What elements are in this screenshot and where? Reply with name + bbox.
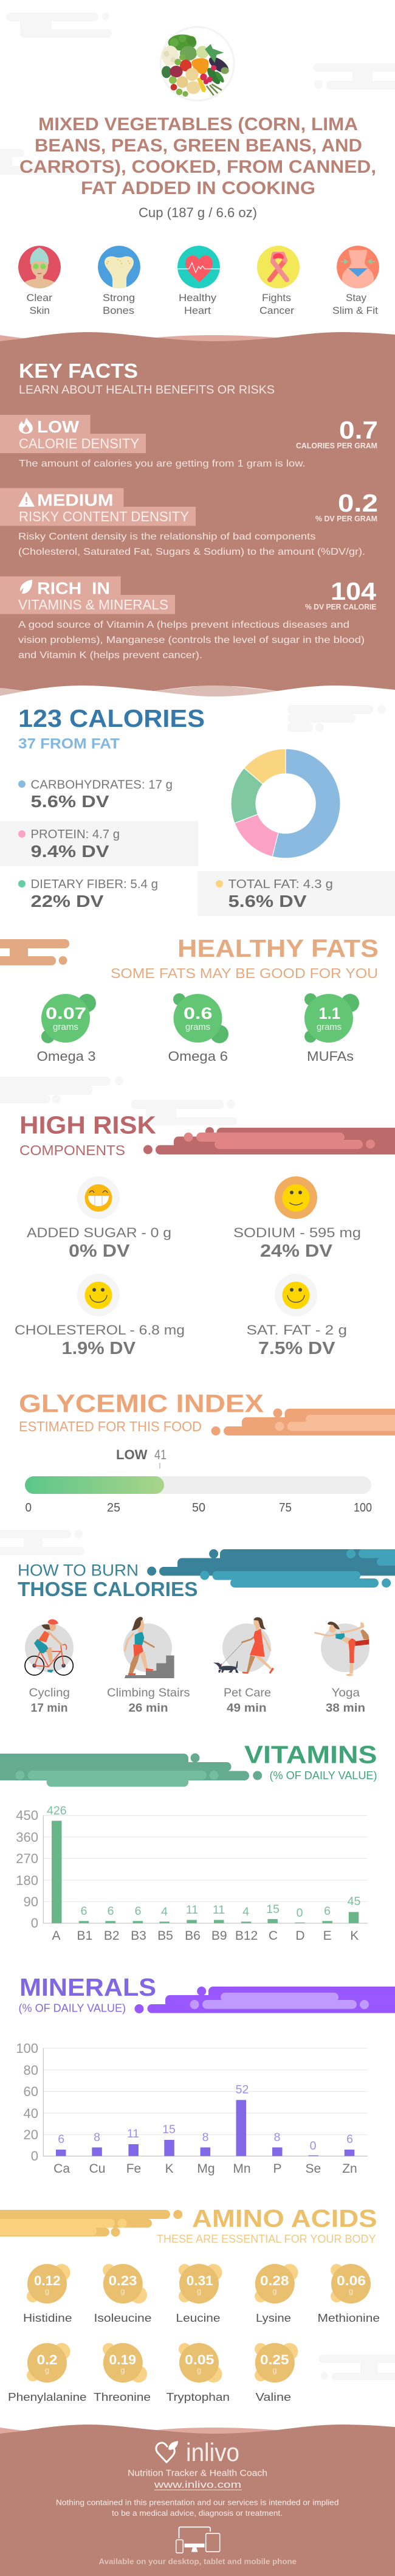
bar chart: minerals: 8 [202,2131,208,2144]
activity: pet care [213,1617,274,1674]
icon: slim and fit [337,246,379,289]
risk: cholesterol: CHOLESTEROL - 6.8 mg [15,1322,185,1338]
activity labels: 17 min [30,1701,68,1715]
heading: how to burn those calories: THOSE CALORIES [18,1578,198,1600]
benefit labels: Heart [184,305,211,316]
footer text: Nothing contained in this presentation and our services is intended or implied [56,2499,339,2507]
bar chart: minerals: 11 [127,2127,139,2140]
icon: fights cancer [257,246,300,288]
fact: risky content density [0,488,378,557]
legend: carbohydrates: CARBOHYDRATES: 17 g [30,779,173,792]
benefit labels: Strong [103,292,135,304]
bar chart: minerals: 0 [310,2139,317,2153]
fact: rich in vitamins and minerals: A good source of Vitamin A (helps prevent infectious diseases and [18,620,349,630]
bar chart: minerals: 6 [346,2133,353,2146]
benefit labels: Stay [346,292,366,304]
glycemic index gauge: 0 [26,1501,32,1515]
amino: phenylalanine: 0.2 [36,2352,57,2367]
glycemic index gauge: 50 [192,1501,205,1515]
activity: climbing stairs [123,1617,174,1678]
bar chart: vitamins: K [350,1929,359,1943]
icon: devices [176,2527,220,2553]
bar chart: vitamins: 6 [135,1904,141,1918]
amino: threonine: g [120,2366,125,2375]
legend: protein: 9.4% DV [30,842,109,861]
bar chart: minerals: K [165,2162,174,2176]
bar chart: minerals: P [273,2162,282,2176]
benefit labels: Cancer [259,305,294,316]
amino: leucine: 0.31 [187,2273,213,2288]
risk: sodium [233,1176,361,1261]
heading: amino acids [157,2204,377,2245]
bar chart: vitamins: 0 [31,1915,38,1931]
bar chart: vitamins: D [295,1929,305,1943]
heading: calories [18,704,205,752]
glycemic index gauge: LOW [116,1447,148,1462]
panel: footer background [0,2425,395,2576]
icon: clear skin [18,246,61,288]
icon: flame [19,418,33,434]
fact: calorie density: 0.7 [339,416,378,444]
amino: valine: Valine [255,2391,291,2403]
amino: threonine: 0.19 [109,2352,136,2367]
activity: yoga [315,1622,369,1676]
heading: glycemic index: GLYCEMIC INDEX [19,1389,264,1417]
amino: leucine: g [197,2286,201,2296]
amino: leucine: Leucine [176,2312,220,2324]
heading: key facts: KEY FACTS [19,359,138,382]
title: CARROTS), COOKED, FROM CANNED, [19,157,376,177]
amino: isoleucine [94,2264,152,2324]
activity labels: 49 min [227,1701,266,1715]
bar chart: vitamins: 0 [297,1906,303,1920]
footer text [56,2468,339,2518]
stat: mufas: 1.1 [318,1004,340,1022]
heading: minerals [18,1973,156,2015]
bar chart: minerals: 40 [24,2106,38,2121]
activity labels [29,1686,365,1715]
footer text: www.inlivo.com [154,2480,241,2490]
banner shape: amino acids [0,2210,182,2237]
heading: minerals: (% OF DAILY VALUE) [18,2001,126,2015]
risk: saturated fat [247,1274,347,1358]
amino: lysine [255,2264,298,2324]
legend: carbohydrates [18,779,173,811]
glycemic index gauge [25,1447,372,1515]
fact: risky content density: (Cholesterol, Saturated Fat, Sugars & Sodium) to the amount (%DV/gr). [18,547,365,557]
banner shape: high risk [143,1127,395,1154]
heading: healthy fats: HEALTHY FATS [177,934,379,962]
stat: omega 6: Omega 6 [168,1049,228,1064]
activity: cycling [25,1619,74,1675]
heading: vitamins: VITAMINS [244,1741,377,1769]
glycemic index gauge: 25 [107,1501,120,1515]
amino: phenylalanine: Phenylalanine [8,2391,86,2403]
glycemic index gauge: 100 [354,1501,372,1515]
bar chart: minerals: 100 [16,2041,38,2056]
fact: calorie density: LOW [37,417,79,436]
risk: sodium: 24% DV [260,1241,333,1261]
risk: cholesterol: 1.9% DV [62,1339,136,1358]
bar chart: vitamins: 11 [186,1903,198,1917]
amino: isoleucine: Isoleucine [94,2312,152,2324]
donut chart: calorie sources [231,749,340,858]
bar chart: vitamins: B5 [157,1929,173,1943]
bar chart: vitamins: 45 [348,1895,360,1908]
amino: methionine [317,2264,380,2324]
heading: calories: 37 FROM FAT [18,736,120,752]
fact: calorie density: The amount of calories you are getting from 1 gram is low. [19,459,305,469]
logo: inlivo [156,2438,239,2467]
heading: glycemic index [19,1389,264,1434]
benefit labels: Skin [29,305,50,316]
activity labels: Cycling [29,1686,70,1699]
benefit labels: Slim & Fit [332,305,378,316]
risk: saturated fat: 7.5% DV [258,1339,335,1358]
bar chart: vitamins: B3 [131,1929,146,1943]
stat: omega 3: grams [53,1022,78,1032]
benefit icons row [18,246,379,288]
amino: histidine: g [45,2286,49,2296]
amino: isoleucine: 0.23 [109,2273,137,2288]
fact: calorie density [0,415,378,469]
amino: leucine [176,2264,222,2324]
icon: strong bones [98,246,140,289]
risk: added sugar: ADDED SUGAR - 0 g [27,1225,171,1240]
fact: rich in vitamins and minerals [0,577,377,661]
amino: methionine: g [349,2286,353,2296]
stat: mufas: grams [317,1022,342,1032]
bar chart: minerals: 60 [24,2084,38,2099]
stat: omega 6: 0.6 [184,1004,213,1022]
heading: vitamins [244,1741,377,1782]
food photo: mixed vegetables [160,27,234,100]
benefit labels: Fights [262,292,291,304]
banner shape: glycemic index [211,1409,395,1436]
amino: methionine: Methionine [317,2312,380,2324]
amino: threonine: Threonine [94,2391,151,2403]
fact: calorie density: CALORIE DENSITY [19,436,139,451]
title: BEANS, PEAS, GREEN BEANS, AND [35,136,362,156]
fact: risky content density: % DV PER GRAM [315,515,377,523]
legend: carbohydrates: 5.6% DV [30,792,109,811]
footer text: Nutrition Tracker & Health Coach [128,2468,267,2478]
bar chart: minerals: 8 [94,2131,100,2144]
bar chart: vitamins: 6 [108,1904,114,1918]
bar chart: vitamins: 270 [16,1851,38,1866]
bar chart: vitamins: 6 [81,1904,87,1918]
legend: dietary fiber [18,878,158,911]
amino: valine: 0.25 [260,2352,289,2367]
legend: protein [0,821,198,866]
legend: total fat [197,871,395,916]
stat: omega 3: Omega 3 [36,1049,96,1064]
benefit labels [27,292,378,316]
bar chart: vitamins: B1 [77,1929,92,1943]
heading: how to burn those calories [18,1561,198,1600]
legend: dietary fiber: 22% DV [30,892,104,911]
heading: high risk: COMPONENTS [19,1142,125,1158]
bar chart: minerals: 20 [24,2127,38,2142]
fact: risky content density: Risky Content density is the relationship of bad components [18,532,316,542]
bar chart: minerals: 0 [31,2148,38,2164]
logo: inlivo: inlivo [186,2438,239,2467]
banner shape: vitamins [0,1753,262,1787]
bar chart: vitamins: 4 [242,1905,249,1918]
bar chart: minerals: Mg [197,2162,215,2176]
bar chart: vitamins: C [269,1929,278,1943]
benefit labels: Healthy [179,292,217,304]
serving size: Cup (187 g / 6.6 oz) [139,205,257,220]
fact: rich in vitamins and minerals: 104 [331,577,376,605]
banner shape: healthy fats [0,939,69,965]
amino: tryptophan: 0.05 [185,2352,214,2367]
title: FAT ADDED IN COOKING [81,178,315,198]
panel: key facts background waves [0,332,395,696]
amino: lysine: 0.28 [260,2273,289,2288]
bar chart: vitamins: 6 [324,1904,331,1918]
bar chart: minerals: Se [305,2162,321,2176]
glycemic index gauge: 41 [154,1447,167,1462]
amino: tryptophan: g [197,2366,201,2375]
title: MIXED VEGETABLES (CORN, LIMA [38,114,358,134]
risk: added sugar: 0% DV [69,1241,130,1261]
benefit labels: Bones [103,305,134,316]
fact: rich in vitamins and minerals: and Vitamin K (helps prevent cancer). [18,650,202,661]
heading: healthy fats: SOME FATS MAY BE GOOD FOR YOU [111,965,378,981]
fact: rich in vitamins and minerals: vision problems), Manganese (controls the level of sugar in the blood) [18,635,365,645]
bar chart: vitamins: 90 [24,1894,38,1909]
amino: isoleucine: g [120,2286,125,2296]
fact: rich in vitamins and minerals: RICH IN [37,579,110,597]
heading: healthy fats [111,934,379,981]
bar chart: minerals [16,2041,368,2176]
legend: dietary fiber: DIETARY FIBER: 5.4 g [30,878,158,891]
activity labels: Climbing Stairs [107,1686,190,1699]
bar chart: vitamins: E [323,1929,332,1943]
bar chart: vitamins: B6 [185,1929,201,1943]
fact: risky content density: MEDIUM [37,490,113,510]
bar chart: minerals: Cu [89,2162,105,2176]
bar chart: vitamins: 426 [47,1804,67,1817]
bar chart: vitamins: 11 [213,1903,225,1917]
bar chart: vitamins [16,1804,368,1943]
bar chart: vitamins: B9 [211,1929,227,1943]
heading: vitamins: (% OF DAILY VALUE) [270,1769,377,1782]
stat: omega 3: 0.07 [46,1004,86,1022]
risk: added sugar [27,1176,171,1261]
bar chart: vitamins: 450 [16,1808,38,1823]
activity labels: 38 min [326,1701,365,1715]
footer text: to be a medical advice, diagnosis or treatment. [112,2509,283,2518]
fact: calorie density: CALORIES PER GRAM [296,442,377,450]
amino: threonine [94,2343,151,2403]
bar chart: minerals: Ca [53,2162,70,2176]
bar chart: minerals: 8 [274,2131,280,2144]
bar chart: vitamins: 360 [16,1830,38,1845]
banner shape: burn calories [147,1549,395,1588]
heading: glycemic index: ESTIMATED FOR THIS FOOD [19,1418,202,1434]
bar chart: vitamins: 180 [16,1873,38,1888]
footer availability note: Available on your desktop, tablet and mobile phone [98,2557,297,2566]
fact: risky content density: RISKY CONTENT DENSITY [19,509,189,524]
benefit labels: Clear [27,292,52,304]
amino: lysine: Lysine [256,2312,291,2324]
bar chart: minerals: Mn [233,2162,251,2176]
amino: histidine: 0.12 [34,2273,61,2288]
stat: omega 6: grams [185,1022,210,1032]
heading: amino acids: THESE ARE ESSENTIAL FOR YOUR BODY [157,2232,376,2245]
amino: valine [255,2343,298,2403]
stat: mufas [304,993,359,1064]
bar chart: vitamins: 4 [161,1905,168,1918]
amino: valine: g [272,2366,277,2375]
amino: phenylalanine [8,2343,86,2403]
risk: sodium: SODIUM - 595 mg [233,1225,361,1240]
risk: cholesterol [15,1274,185,1358]
stat: mufas: MUFAs [307,1049,354,1064]
heading: amino acids: AMINO ACIDS [192,2204,377,2232]
risk: saturated fat: SAT. FAT - 2 g [247,1322,347,1338]
amino: lysine: g [272,2286,277,2296]
heading: calories: 123 CALORIES [18,704,205,732]
amino: tryptophan [167,2343,230,2403]
heading: key facts: LEARN ABOUT HEALTH BENEFITS OR RISKS [19,384,275,397]
legend: protein: PROTEIN: 4.7 g [30,828,120,841]
amino: histidine: Histidine [23,2312,72,2324]
fact: risky content density: 0.2 [338,489,378,517]
bar chart: minerals: Fe [126,2162,141,2176]
bar chart: vitamins: A [52,1929,61,1943]
fact: rich in vitamins and minerals: % DV PER CALORIE [305,603,377,611]
bar chart: minerals: 80 [24,2063,38,2078]
bar chart: vitamins: B2 [104,1929,120,1943]
title [19,114,376,198]
stat: omega 3 [36,994,96,1064]
amino: methionine: 0.06 [337,2273,366,2288]
bar chart: vitamins: B12 [235,1929,258,1943]
fact: rich in vitamins and minerals: VITAMINS & MINERALS [18,597,168,613]
bar chart: vitamins: 15 [266,1903,280,1916]
bar chart: minerals: Zn [342,2162,357,2176]
activity labels: 26 min [129,1701,168,1715]
amino: tryptophan: Tryptophan [167,2391,230,2403]
legend: total fat: TOTAL FAT: 4.3 g [228,878,333,891]
activity labels: Pet Care [224,1686,271,1699]
legend: total fat: 5.6% DV [228,892,307,911]
amino: histidine [23,2264,72,2324]
bar chart: minerals: 6 [58,2133,64,2146]
stat: omega 6 [168,993,228,1064]
bar chart: minerals: 15 [162,2123,176,2136]
glycemic index gauge: 75 [279,1501,292,1515]
activity labels: Yoga [332,1686,360,1699]
icon: healthy heart [177,246,220,288]
bar chart: minerals: 52 [236,2083,249,2096]
heading: minerals: MINERALS [19,1973,156,2001]
heading: how to burn those calories: HOW TO BURN [18,1561,139,1579]
heading: key facts [19,359,275,397]
heading: high risk: HIGH RISK [19,1111,156,1139]
banner shape: minerals [135,1987,395,2013]
icon: warning triangle [18,491,35,507]
amino: phenylalanine: g [45,2366,49,2375]
icon: leaf [20,580,32,594]
heading: high risk [19,1111,156,1158]
